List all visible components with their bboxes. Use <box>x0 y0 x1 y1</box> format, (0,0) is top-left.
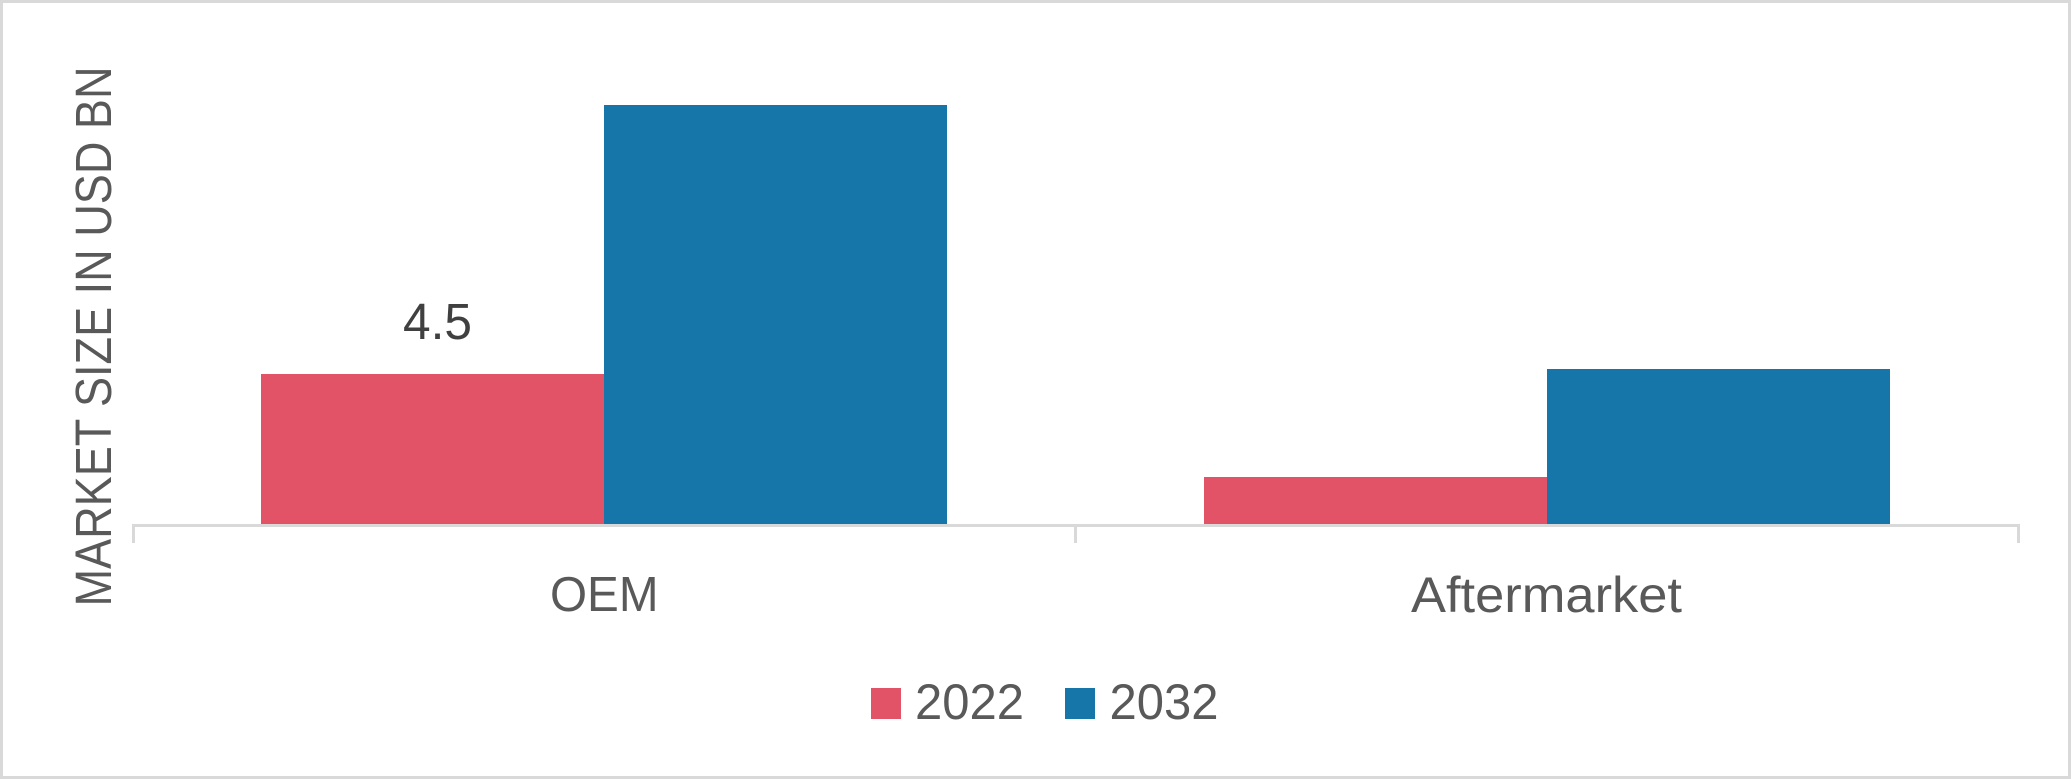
bar: Aftermarket 2022 <box>1204 477 1547 524</box>
x axis with ticks <box>132 524 2020 543</box>
data label: 4.5: 4.5 <box>403 293 472 350</box>
legend label: 2032: 2032 <box>1110 674 1218 730</box>
bars: Aftermarket <box>1204 369 1890 524</box>
legend swatch: 2032 <box>1065 688 1095 719</box>
legend label: 2022: 2022 <box>915 674 1024 730</box>
category label: OEM: OEM <box>550 568 658 622</box>
bar: OEM 2022 <box>261 374 604 524</box>
legend <box>871 674 1218 730</box>
legend swatch: 2022 <box>871 688 901 719</box>
category label: Aftermarket: Aftermarket <box>1411 567 1682 623</box>
bar: Aftermarket 2032 <box>1547 369 1890 524</box>
bars: OEM <box>261 105 947 524</box>
bar: OEM 2032 <box>604 105 947 524</box>
y axis title: MARKET SIZE IN USD BN <box>65 66 122 606</box>
